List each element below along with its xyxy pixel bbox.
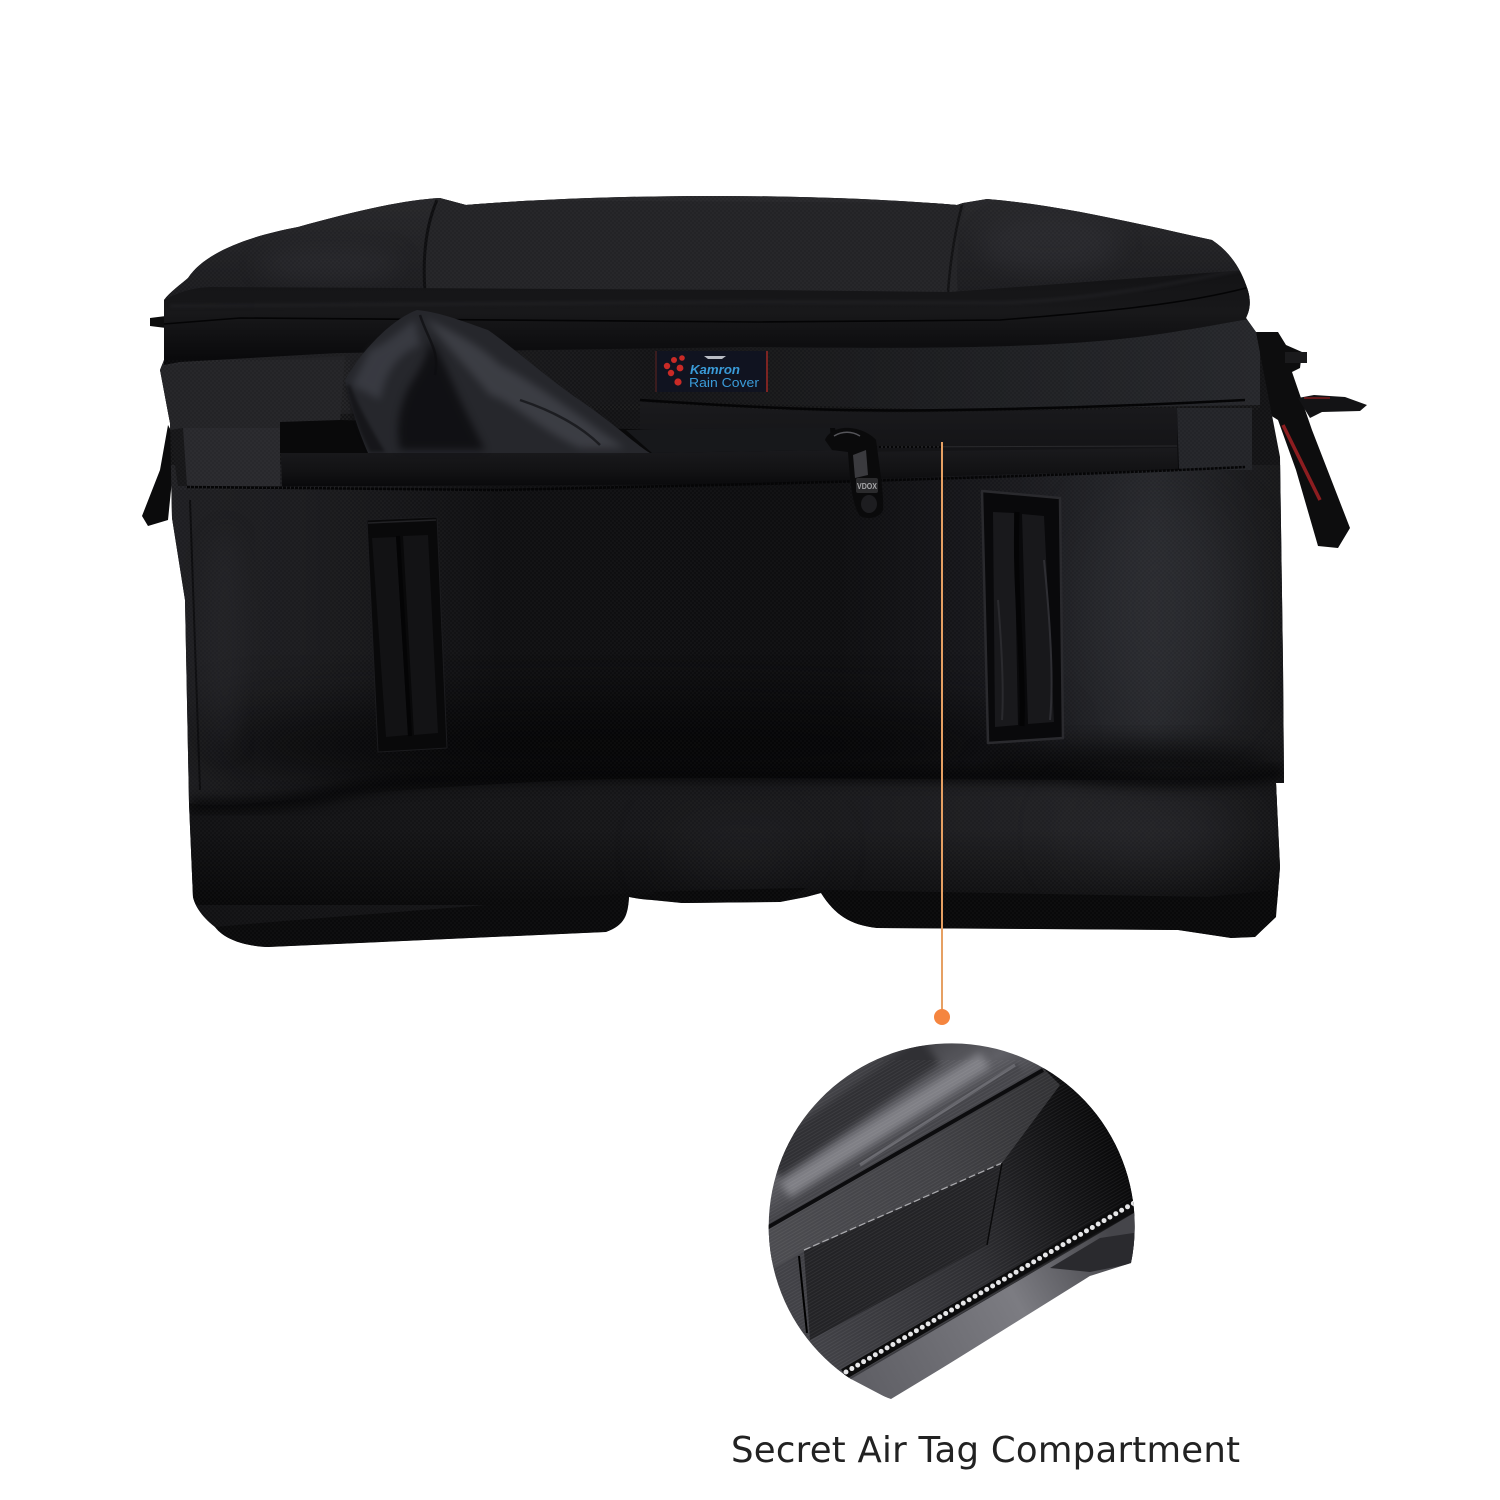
circular detail photo: secret compartment — [760, 1040, 1145, 1400]
right carry handle loop — [982, 491, 1063, 743]
soft highlights on side panel edges — [201, 530, 249, 750]
top lid panel — [160, 190, 1260, 300]
orange callout dot — [934, 1009, 950, 1025]
front panel shading — [190, 500, 1280, 790]
fabric weave texture — [160, 190, 1290, 950]
caption: Secret Air Tag Compartment — [731, 1430, 1240, 1471]
backpack product photo — [142, 190, 1367, 950]
orange callout leader line — [941, 442, 943, 1012]
lid band — [164, 270, 1256, 365]
bag body silhouette — [160, 196, 1284, 947]
pocket stitching — [799, 1163, 1002, 1333]
right upper side patch — [1176, 408, 1252, 470]
front zipper pull — [825, 428, 883, 518]
red droplets — [664, 355, 685, 386]
middle panel under lid — [160, 318, 1260, 420]
packed rain cover — [345, 310, 832, 453]
lower padded base — [185, 772, 1285, 940]
black fabric pocket lining — [768, 1060, 1134, 1380]
dark edge on flap — [1050, 1232, 1140, 1272]
brand label: Kamron Rain Cover — [655, 351, 768, 392]
left upper side patches — [160, 366, 340, 486]
brand label: Kamron Rain Cover: Rain Cover — [689, 375, 760, 390]
brand label: Kamron Rain Cover: Kamron — [690, 362, 740, 377]
upper grey tube bands — [760, 1040, 1145, 1260]
pocket lip — [187, 448, 1245, 490]
right zipper pull with red stripe — [1256, 332, 1367, 548]
lower grey flap — [851, 1213, 1140, 1400]
zipper teeth — [844, 1203, 1136, 1374]
main front panel — [160, 465, 1290, 805]
left carry handle loop — [367, 517, 447, 752]
open pocket interior — [280, 420, 840, 453]
back mesh padding — [215, 888, 1276, 947]
left side pull tab — [142, 316, 176, 526]
zippered strip — [879, 410, 1178, 452]
front zipper pull: VDOX — [857, 482, 878, 491]
